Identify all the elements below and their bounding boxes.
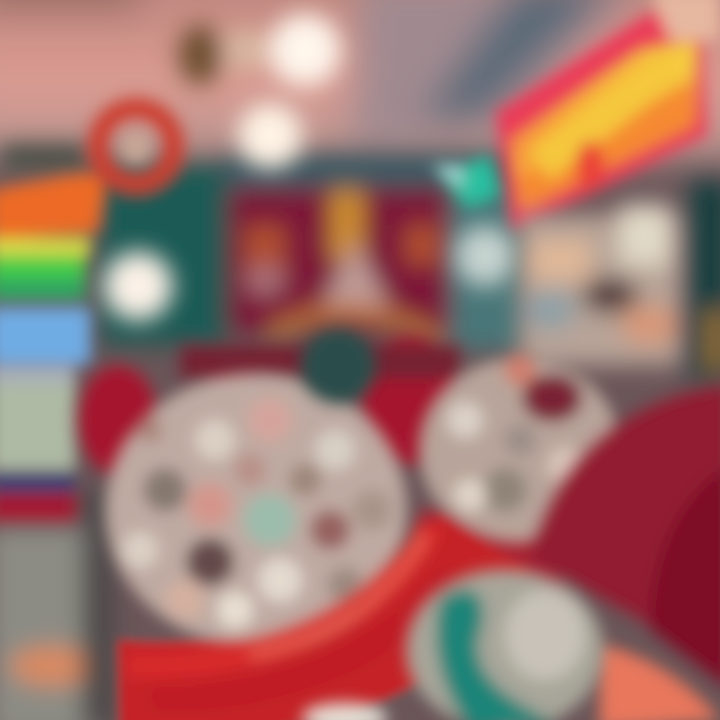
rainbow display bbox=[0, 172, 108, 524]
red bowl rim bbox=[128, 525, 450, 696]
red counter bbox=[78, 335, 560, 610]
candy shelves bbox=[520, 205, 680, 365]
icon: hanging lights bbox=[104, 14, 515, 320]
floor bbox=[0, 490, 114, 720]
icon: red ring bbox=[98, 108, 174, 184]
icon: teal and white ball bbox=[303, 570, 603, 720]
ceiling bbox=[0, 0, 720, 160]
icon: teal gem bbox=[430, 155, 500, 208]
sign board bbox=[495, 0, 720, 232]
candy bowl: right bbox=[420, 354, 620, 542]
back wall bbox=[0, 145, 720, 380]
crimson sofa bbox=[530, 385, 720, 720]
candy bowl: main bbox=[106, 374, 406, 646]
red bowl base bbox=[118, 515, 530, 720]
icon: green ball bbox=[300, 328, 376, 404]
